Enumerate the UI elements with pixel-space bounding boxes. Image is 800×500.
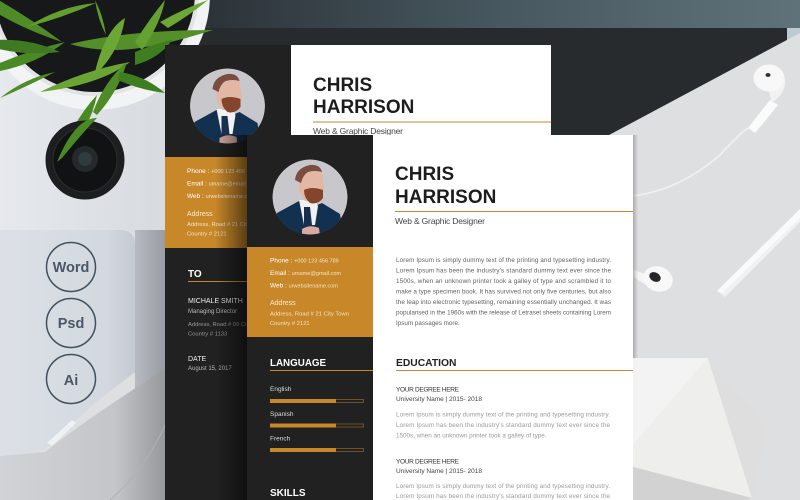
education rule bbox=[396, 370, 633, 371]
back job title: Web & Graphic Designer bbox=[313, 126, 403, 136]
language: French: French bbox=[270, 436, 291, 442]
back name: CHRIS bbox=[313, 75, 372, 96]
back recipient name: MICHALE SMITH bbox=[188, 298, 243, 305]
skills heading: SKILLS bbox=[270, 488, 306, 499]
front resume sheet bbox=[247, 135, 638, 500]
profile paragraph: 1500s, when an unknown printer took a galley of type and scrambled it to bbox=[396, 278, 611, 285]
front contact band bbox=[247, 247, 373, 337]
back address lines: Address, Road # 21 City bbox=[187, 222, 250, 228]
plant in white pot bbox=[0, 0, 213, 162]
back recipient country: Country # 1133 bbox=[188, 332, 227, 338]
degree entry 1: Lorem Ipsum has been the industry's standard dummy text ever since the bbox=[396, 422, 610, 429]
degree entry 1: YOUR DEGREE HERE bbox=[396, 386, 460, 394]
back recipient role: Managing Director bbox=[188, 309, 237, 315]
degree entry 1: University Name | 2015- 2018 bbox=[396, 396, 482, 403]
language: French bbox=[270, 436, 364, 452]
language: English bbox=[270, 386, 364, 403]
profile paragraph: Lorem Ipsum is simply dummy text of the printing and typesetting industry. bbox=[396, 257, 611, 264]
camera lens bbox=[46, 118, 124, 200]
back portrait bbox=[190, 68, 265, 149]
back contact: phone: Phone : +000 123 456 bbox=[187, 168, 245, 175]
white paper pyramid bbox=[633, 358, 767, 500]
front job title: Web & Graphic Designer bbox=[395, 216, 485, 226]
degree entry 2: University Name | 2015- 2018 bbox=[396, 468, 482, 475]
front address line: Address, Road # 21 City Town bbox=[270, 312, 349, 318]
earphone with cable bbox=[633, 64, 785, 196]
front sidebar bbox=[247, 135, 373, 500]
back header rule bbox=[313, 122, 551, 123]
language heading: LANGUAGE bbox=[270, 358, 327, 369]
format badge: Ai: Ai bbox=[64, 373, 78, 389]
profile paragraph: the leap into electronic typesetting, remaining essentially unchanged. It was bbox=[396, 299, 611, 306]
front country: Country # 2121 bbox=[270, 321, 310, 327]
front name: CHRIS bbox=[395, 164, 454, 185]
format badge: Psd bbox=[46, 298, 96, 348]
front white page bbox=[373, 135, 633, 500]
language rule bbox=[270, 370, 373, 371]
back date heading: DATE bbox=[188, 356, 206, 363]
back country: Country # 2121 bbox=[187, 232, 227, 238]
back white header panel bbox=[291, 45, 551, 155]
language: Spanish bbox=[270, 411, 364, 428]
format badge: Psd: Psd bbox=[58, 316, 84, 332]
degree entry 2: Lorem Ipsum has been the industry's standard dummy text ever since the bbox=[396, 493, 610, 500]
back recipient address: Address, Road # 09 City bbox=[188, 322, 251, 328]
education heading: EDUCATION bbox=[396, 358, 456, 369]
front portrait bbox=[272, 160, 348, 240]
front contact: email: Email : urname@gmail.com bbox=[270, 270, 341, 277]
back sidebar bbox=[165, 45, 291, 500]
back address heading: Address bbox=[187, 211, 213, 218]
format badge: Word: Word bbox=[53, 260, 89, 276]
back TO rule bbox=[188, 281, 248, 282]
back contact: email: Email : umame@email.com bbox=[187, 180, 258, 188]
back surname: HARRISON bbox=[313, 97, 414, 118]
back contact: web: Web : urwebsitename.com bbox=[187, 193, 255, 200]
back contact band bbox=[165, 157, 291, 248]
degree entry 1: Lorem Ipsum is simply dummy text of the printing and typesetting industry. bbox=[396, 412, 610, 418]
language: English: English bbox=[270, 386, 292, 393]
degree entry 2: YOUR DEGREE HERE bbox=[396, 458, 460, 466]
second earbud bbox=[633, 262, 676, 296]
language: Spanish: Spanish bbox=[270, 411, 294, 418]
format badge: Word bbox=[46, 242, 96, 292]
front address heading: Address bbox=[270, 300, 296, 307]
profile paragraph: Ipsum passages more. bbox=[396, 320, 460, 327]
profile paragraph: popularised in the 1960s with the release of Letraset sheets containing Lorem bbox=[396, 310, 611, 316]
degree entry 2 bbox=[396, 458, 610, 500]
back TO heading: TO bbox=[188, 269, 202, 280]
page edge shadow bbox=[633, 135, 638, 358]
back resume sheet bbox=[165, 45, 551, 500]
front contact: web: Web : urwebsitename.com bbox=[270, 282, 338, 290]
shadow of front sheet bbox=[215, 135, 247, 500]
white pencil bbox=[717, 209, 800, 297]
format badge: Ai bbox=[46, 354, 96, 404]
front contact: phone: Phone : +000 123 456 789 bbox=[270, 258, 339, 264]
degree entry 1 bbox=[396, 386, 610, 440]
back date value: August 15, 2017 bbox=[188, 366, 232, 372]
profile paragraph: Lorem Ipsum has been the industry's standard dummy text ever since the bbox=[396, 268, 611, 274]
front surname: HARRISON bbox=[395, 187, 496, 208]
profile paragraph: make a type specimen book. It has survived not only five centuries, but also bbox=[396, 288, 611, 296]
degree entry 1: 1500s, when an unknown printer took a galley of type. bbox=[396, 432, 547, 440]
front header rule bbox=[395, 211, 633, 212]
tablet with page curl bbox=[0, 230, 165, 500]
degree entry 2: Lorem Ipsum is simply dummy text of the printing and typesetting industry. bbox=[396, 483, 610, 490]
profile paragraph bbox=[396, 257, 611, 327]
